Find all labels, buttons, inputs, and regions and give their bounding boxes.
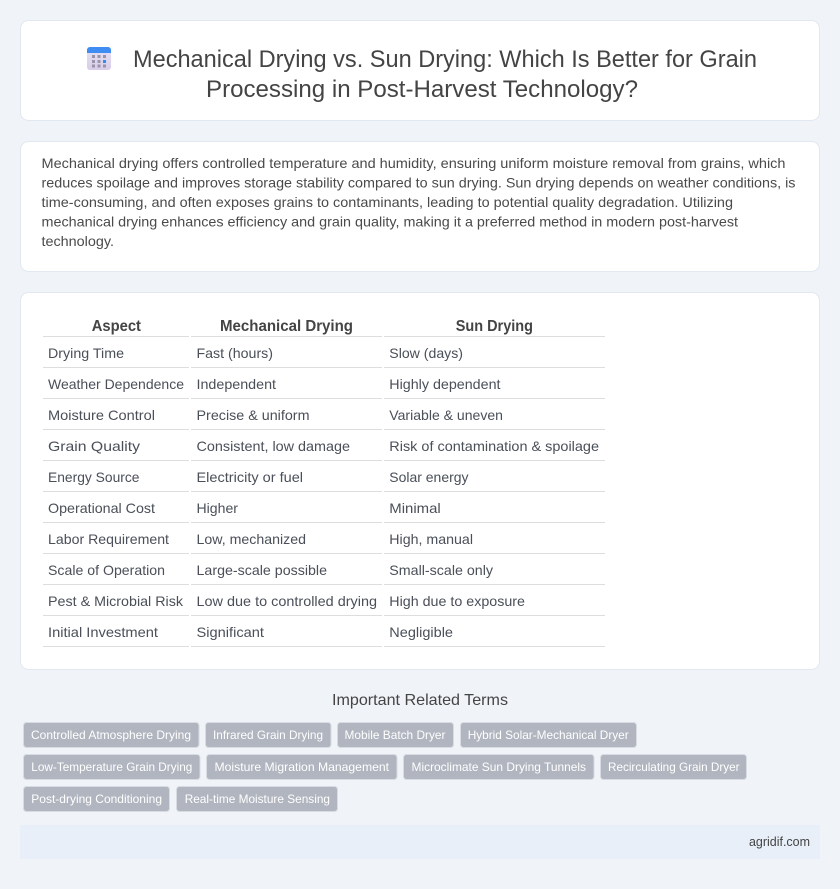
panel: header — [20, 20, 820, 120]
related terms tags — [24, 722, 746, 812]
table row: pest and microbial risk: Low due to controlled drying — [196, 593, 377, 609]
table row: grain quality: Grain Quality — [48, 438, 140, 454]
tag: Recirculating Grain Dryer — [608, 760, 740, 774]
table row: pest and microbial risk: Pest & Microbial Risk — [48, 593, 184, 609]
table row: moisture control: Moisture Control — [48, 407, 155, 423]
table row: initial investment: Significant — [196, 624, 264, 640]
table row: pest and microbial risk — [43, 593, 605, 616]
table row: drying time — [43, 345, 605, 368]
tag — [338, 722, 454, 748]
table row: weather dependence: Independent — [196, 376, 276, 392]
table row: operational cost: Operational Cost — [48, 500, 155, 516]
tag: Controlled Atmosphere Drying — [31, 728, 191, 742]
table row: grain quality: Risk of contamination & spoilage — [389, 438, 599, 454]
title: Processing in Post-Harvest Technology? — [206, 76, 638, 103]
table row: weather dependence — [43, 376, 605, 398]
table row: scale of operation: Scale of Operation — [48, 562, 165, 578]
title: Mechanical Drying vs. Sun Drying: Which Is Better for Grain — [133, 46, 757, 73]
table row: grain quality — [43, 438, 605, 460]
table header row: Sun Drying — [456, 318, 533, 335]
tag — [24, 722, 199, 748]
table row: pest and microbial risk: High due to exposure — [389, 593, 525, 609]
table row: moisture control — [43, 407, 605, 430]
tag — [24, 786, 170, 812]
table row: grain quality: Consistent, low damage — [196, 438, 350, 454]
table header row — [43, 318, 605, 336]
table row: energy source: Solar energy — [389, 469, 468, 485]
table row: drying time: Fast (hours) — [196, 345, 273, 361]
table row: energy source — [43, 469, 605, 492]
table row: weather dependence: Weather Dependence — [48, 376, 184, 392]
panel: comparison table — [20, 292, 820, 670]
table row: energy source: Energy Source — [48, 469, 140, 485]
table row: initial investment: Negligible — [389, 624, 453, 640]
tag: Post-drying Conditioning — [31, 792, 162, 806]
tag — [600, 754, 746, 780]
text block: summary paragraph: Mechanical drying offers controlled temperature and humidity, ensuring uniform moisture removal from grains, which — [42, 155, 786, 171]
table row: energy source: Electricity or fuel — [196, 469, 303, 485]
table row: initial investment: Initial Investment — [48, 624, 158, 640]
table row: moisture control: Variable & uneven — [389, 407, 503, 423]
tag — [176, 786, 338, 812]
table row: labor requirement: Labor Requirement — [48, 531, 169, 547]
tag — [206, 722, 331, 748]
table header row: Mechanical Drying — [220, 318, 353, 335]
table row: operational cost — [43, 500, 605, 522]
tag: Mobile Batch Dryer — [344, 728, 446, 742]
heading: important related terms: Important Related Terms — [332, 692, 508, 709]
tag: Real-time Moisture Sensing — [185, 792, 330, 806]
footer source text: agridif.com — [749, 834, 810, 849]
tag — [460, 722, 636, 748]
table row: labor requirement: High, manual — [389, 531, 473, 547]
tag: Moisture Migration Management — [214, 760, 390, 774]
text block: summary paragraph: reduces spoilage and improves storage stability compared to sun drying. Sun drying depends on weather conditions, is — [42, 174, 796, 190]
table row: operational cost: Higher — [196, 500, 238, 516]
table row: drying time: Slow (days) — [389, 345, 463, 361]
tag — [24, 754, 200, 780]
table row: labor requirement — [43, 531, 605, 554]
table row: scale of operation — [43, 562, 605, 584]
title — [133, 46, 757, 103]
tag: Microclimate Sun Drying Tunnels — [412, 760, 586, 774]
footer bar — [20, 825, 820, 859]
text block: summary paragraph: technology. — [42, 233, 114, 249]
tag — [404, 754, 594, 780]
table row: scale of operation: Small-scale only — [389, 562, 493, 578]
text block: summary paragraph: time-consuming, and often exposes grains to contaminants, leading to potential quality degradation. Utilizing — [42, 194, 733, 210]
table row: moisture control: Precise & uniform — [196, 407, 310, 423]
tag — [206, 754, 397, 780]
text block: summary paragraph: mechanical drying enhances efficiency and grain quality, making it a preferred method in modern post-harvest — [42, 214, 738, 230]
table row: operational cost: Minimal — [389, 500, 441, 516]
table row: scale of operation: Large-scale possible — [196, 562, 327, 578]
tag: Low-Temperature Grain Drying — [31, 760, 192, 774]
table header row: Aspect — [92, 318, 141, 335]
table row: weather dependence: Highly dependent — [389, 376, 501, 392]
table row: drying time: Drying Time — [48, 345, 124, 361]
text block: summary paragraph — [42, 155, 796, 249]
table row: initial investment — [43, 624, 605, 646]
tag: Hybrid Solar-Mechanical Dryer — [468, 728, 629, 742]
tag: Infrared Grain Drying — [213, 728, 323, 742]
table row: labor requirement: Low, mechanized — [196, 531, 306, 547]
icon: calendar — [87, 47, 111, 70]
panel: summary — [20, 142, 820, 272]
